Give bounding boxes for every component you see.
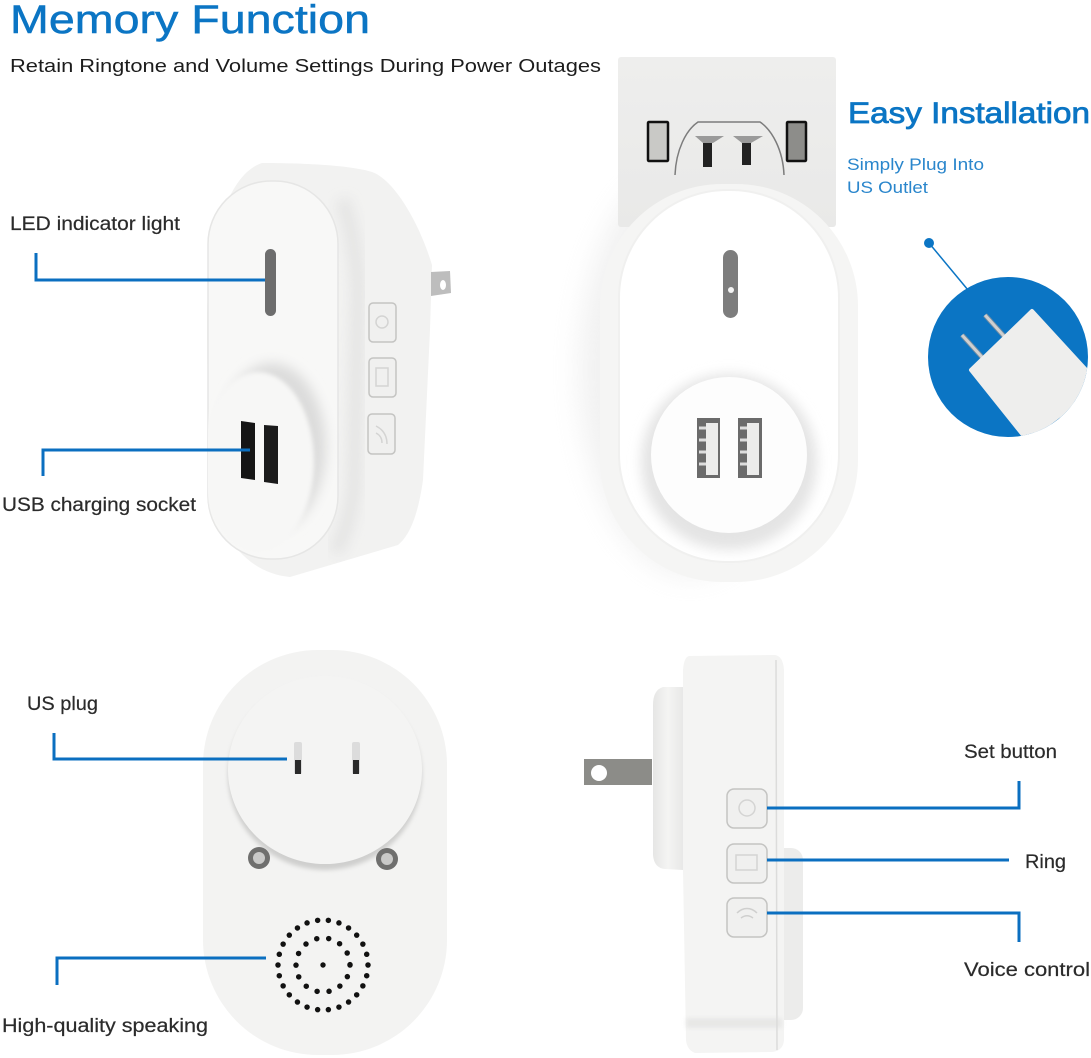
LED indicator (723, 250, 738, 318)
LED indicator (265, 249, 276, 316)
panel: side view of device (584, 655, 803, 1053)
panel: angled front view of device (202, 163, 451, 577)
wall outlet with slots (675, 122, 784, 175)
leader line: speaker (57, 958, 266, 985)
heading: easy installation: Easy Installation (848, 97, 1090, 130)
leader line: ring (767, 858, 1009, 862)
text: simply plug into us outlet: US Outlet (847, 178, 928, 197)
plug blades (294, 742, 360, 774)
label: high-quality speaking: High-quality speaking (2, 1016, 208, 1037)
USB sockets (697, 418, 762, 478)
label: ring: Ring (1025, 852, 1066, 873)
text: simply plug into us outlet: Simply Plug Into (847, 155, 984, 174)
callout: plug detail circle (924, 238, 1091, 440)
plug blade (584, 759, 652, 785)
rear plug base (653, 687, 683, 870)
plug prong (431, 271, 451, 296)
round socket boss (208, 360, 329, 517)
round socket boss (641, 374, 817, 550)
device face (619, 190, 839, 562)
screws (248, 847, 398, 870)
label: USB charging socket: USB charging socket (2, 495, 197, 516)
wall plate (618, 57, 836, 227)
side buttons (368, 303, 396, 454)
label: set button: Set button (964, 742, 1057, 763)
text: simply plug into us outlet (847, 155, 984, 197)
panel: rear view of device (203, 650, 447, 1055)
front face (208, 181, 338, 559)
leader line: USB (43, 450, 250, 476)
leader line: US plug (54, 733, 287, 759)
USB sockets (241, 421, 278, 484)
device outer shell (600, 184, 858, 582)
round plug base (228, 676, 422, 870)
leader line: LED (36, 253, 265, 280)
main body (683, 655, 784, 1053)
label: voice control: Voice control (964, 960, 1090, 981)
front bump (770, 848, 803, 1020)
subtitle: Retain Ringtone and Volume Settings During Power Outages (10, 56, 601, 76)
buttons (727, 789, 767, 937)
leader line: voice control (767, 913, 1019, 942)
speaker grille (278, 920, 368, 1010)
label: LED indicator light: LED indicator light (10, 214, 181, 235)
leader line: set button (767, 781, 1019, 808)
panel: device plugged into wall outlet (580, 57, 858, 582)
label: US plug: US plug (27, 694, 98, 715)
plate USB ports (648, 122, 806, 161)
